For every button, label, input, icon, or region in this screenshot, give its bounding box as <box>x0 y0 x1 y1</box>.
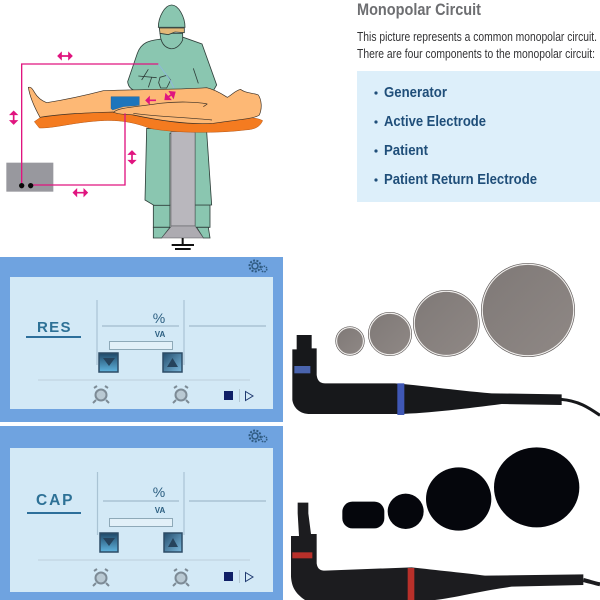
button: decrease <box>99 353 118 372</box>
readout grid <box>38 472 266 560</box>
label: CAP: CAP <box>36 492 76 509</box>
icon: timer right <box>173 386 189 403</box>
handpiece body <box>291 503 583 600</box>
label: RES: RES <box>37 319 74 336</box>
icon: timer left <box>93 569 109 586</box>
operating table column <box>162 132 203 238</box>
VA readout: VA <box>155 506 165 515</box>
panel: CAP screen <box>0 426 283 600</box>
disc rim shadows <box>336 263 575 357</box>
red markers <box>292 552 414 600</box>
list items: Patient <box>384 142 428 159</box>
cable <box>561 399 600 415</box>
blue markers <box>294 366 404 415</box>
level bar <box>110 518 172 526</box>
panel: RES screen <box>0 257 283 422</box>
power readout: % <box>153 310 165 326</box>
list items: Active Electrode <box>384 113 486 130</box>
active electrode tip <box>158 64 174 88</box>
diagram: monopolar circuit illustration <box>6 5 263 249</box>
list items: Patient Return Electrode <box>384 171 537 188</box>
patient return electrode pad <box>111 97 139 110</box>
label underline <box>26 336 81 338</box>
play button <box>240 389 253 402</box>
icon: settings gears <box>250 260 267 272</box>
cable <box>583 580 600 584</box>
metal electrode discs <box>336 264 574 356</box>
list items: Generator <box>384 84 447 101</box>
capacitive handpiece and black electrodes <box>291 447 600 600</box>
black electrode discs <box>342 447 579 531</box>
stop button <box>224 391 233 400</box>
button: increase <box>164 533 182 552</box>
handpiece body <box>292 335 562 414</box>
button: decrease <box>100 533 118 552</box>
panel: components list <box>357 71 600 202</box>
button: increase <box>163 353 182 372</box>
readout grid <box>38 300 266 380</box>
surgeon <box>128 5 217 238</box>
table pad <box>34 111 263 132</box>
VA readout: VA <box>155 330 165 339</box>
stop button <box>224 572 233 581</box>
patient <box>28 87 261 124</box>
power readout: % <box>153 484 165 500</box>
generator terminals <box>19 183 33 188</box>
circuit wires <box>22 64 158 185</box>
resistive handpiece and metal electrodes <box>292 263 600 415</box>
current arrows <box>11 53 175 195</box>
icon: timer left <box>93 386 109 403</box>
list items <box>374 84 537 188</box>
level bar <box>110 342 172 350</box>
patient arm and body contours <box>113 102 212 120</box>
icon: timer right <box>173 569 189 586</box>
icon: settings gears <box>250 430 267 442</box>
heading: Monopolar Circuit: Monopolar Circuit <box>357 1 481 19</box>
generator box <box>6 163 53 192</box>
ground symbol <box>172 238 194 249</box>
intro text <box>357 29 597 61</box>
label underline <box>27 512 81 514</box>
play button <box>240 570 253 583</box>
